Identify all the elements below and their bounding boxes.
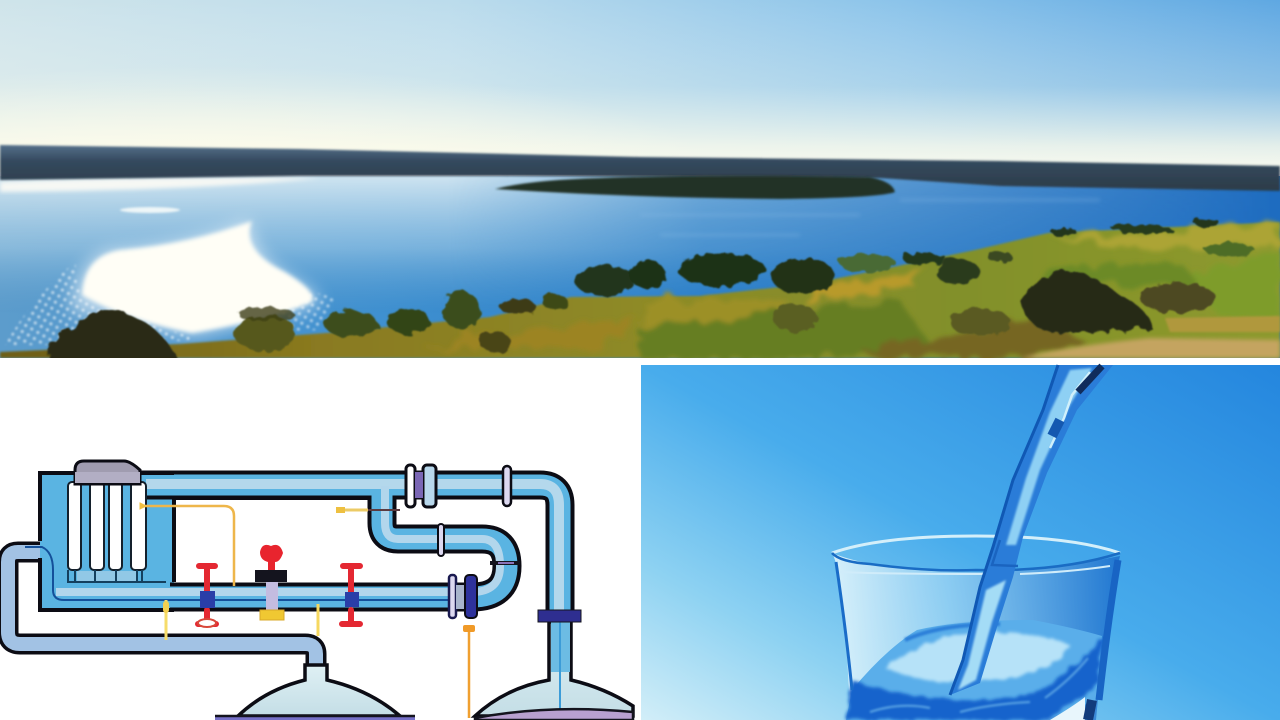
blue background xyxy=(641,365,1280,720)
sun glare on water xyxy=(5,220,335,345)
lake water xyxy=(0,176,1280,358)
filter cartridges xyxy=(68,461,166,582)
left blue reservoir body xyxy=(40,473,174,610)
yellow and green grass patches xyxy=(420,226,1280,358)
glass body xyxy=(832,553,1120,720)
right tank dome xyxy=(475,622,633,720)
shrubs along the shore xyxy=(45,219,1255,362)
reservoir outer wall xyxy=(40,473,174,610)
gauge xyxy=(336,507,400,513)
dark blue collar xyxy=(538,610,581,622)
center valve xyxy=(255,545,287,620)
pouring water stream xyxy=(950,365,1113,695)
panel: lake landscape photo xyxy=(0,0,1280,362)
glass rim and walls xyxy=(832,536,1120,720)
sky xyxy=(0,0,1280,172)
island xyxy=(495,176,895,199)
left tank dome xyxy=(215,665,415,720)
pipe network: outlines, body and highlight xyxy=(25,484,560,612)
white interior outline xyxy=(174,498,374,582)
pipe flanges xyxy=(406,465,520,618)
distant shoreline xyxy=(0,145,1280,191)
left red valve xyxy=(198,566,216,627)
right red valve xyxy=(342,566,360,624)
panel: water treatment pipe diagram xyxy=(8,461,633,720)
orange level indicator xyxy=(463,625,475,718)
water in glass xyxy=(845,620,1103,720)
panel: water pouring into glass photo xyxy=(641,365,1280,720)
dirt path xyxy=(1020,338,1280,358)
supply pipe to left tank xyxy=(8,552,316,668)
yellow field strip xyxy=(1165,316,1280,332)
grassy hillside xyxy=(0,222,1280,358)
yellow sensor lines xyxy=(140,503,318,640)
